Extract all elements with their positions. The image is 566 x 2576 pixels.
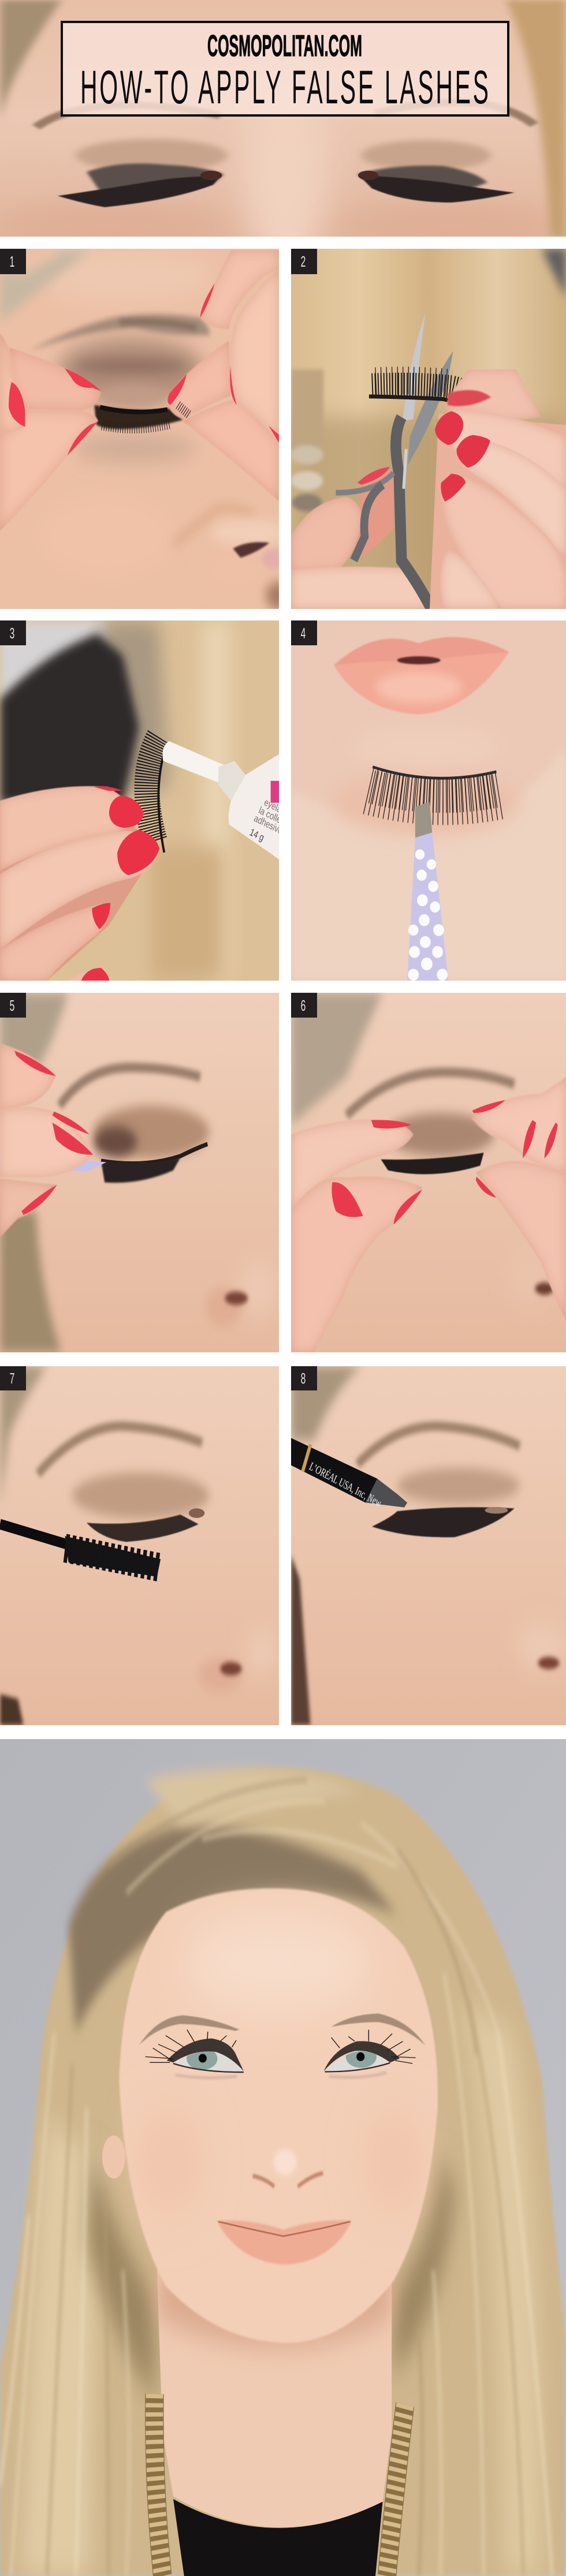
eye: right closed lid xyxy=(358,140,515,203)
step badge 2 xyxy=(291,249,317,274)
glue tube: la colle xyxy=(257,805,282,825)
black top xyxy=(173,2499,382,2576)
left hand under scissors xyxy=(291,467,426,609)
eyebrow xyxy=(358,1426,520,1464)
step badge 3 xyxy=(0,620,26,645)
final portrait eyes and brows xyxy=(139,2013,425,2080)
left hand fingers with nails xyxy=(291,1119,422,1352)
panel: step 1 pressing lash on xyxy=(0,249,293,610)
glue tube: eyelash xyxy=(262,797,291,819)
right hand fingers xyxy=(430,369,566,609)
eye with liner and lashes xyxy=(372,1468,520,1537)
mascara wand xyxy=(0,1524,161,1577)
step badge 3: 3 xyxy=(10,625,14,642)
step badge 7: 7 xyxy=(10,1370,14,1387)
panel: step 8 eyeliner pencil xyxy=(291,1366,566,1725)
hair strands xyxy=(0,1780,552,2576)
glue tube xyxy=(162,741,291,859)
step badge 1: 1 xyxy=(10,253,14,270)
title box xyxy=(62,22,508,115)
step badge 7 xyxy=(0,1366,26,1390)
tweezer tip xyxy=(0,1151,106,1172)
eyebrows xyxy=(139,2013,425,2045)
ear xyxy=(102,2136,125,2178)
panel: step 7 mascara wand xyxy=(0,1366,279,1725)
hair xyxy=(0,1768,566,2576)
step badge 8: 8 xyxy=(301,1370,306,1387)
hand fingers with nails xyxy=(0,1044,93,1237)
false lash line xyxy=(94,405,183,429)
title box: COSMOPOLITAN.COM xyxy=(207,29,362,63)
face xyxy=(119,1889,438,2343)
nose xyxy=(173,508,293,610)
necklace blur xyxy=(291,369,323,511)
right hand fingers xyxy=(167,250,279,502)
panel: step 3 lash glue xyxy=(0,620,291,981)
panel: step 6 pressing lash with fingers xyxy=(291,993,566,1352)
panel: step 5 placing lash with tweezers xyxy=(0,993,279,1352)
step badge 4: 4 xyxy=(301,625,306,642)
icon: nostril xyxy=(538,1657,560,1669)
eyebrow xyxy=(347,1072,515,1115)
fingers with red nails xyxy=(0,786,159,981)
gold necklace xyxy=(154,2394,405,2576)
panel: final portrait with lashes xyxy=(0,1739,566,2576)
eyeliner pencil xyxy=(291,1438,407,1510)
step badge 5: 5 xyxy=(10,997,14,1014)
right hand fingers with nails xyxy=(471,1077,566,1321)
glue tube: adhesive xyxy=(252,813,284,837)
headline: HOW-TO APPLY FALSE LASHES xyxy=(80,60,489,114)
eye: left closed lid xyxy=(58,139,228,207)
nose and mouth xyxy=(217,2149,352,2265)
step badge 6 xyxy=(291,993,317,1018)
lips xyxy=(334,637,509,715)
step badge 6: 6 xyxy=(301,997,306,1014)
false lash held xyxy=(147,737,167,853)
eye makeup and lashes xyxy=(72,1472,209,1542)
panel: hero closed eyes with title xyxy=(0,0,566,268)
eyebrow xyxy=(59,1067,200,1106)
eye makeup and lashes xyxy=(94,1106,209,1183)
panel: step 4 lash on tweezers in front of lips xyxy=(291,620,566,981)
eyeliner pencil: L’ORÉAL USA, Inc, New xyxy=(308,1459,383,1510)
eyebrow xyxy=(38,1426,202,1474)
false lash xyxy=(368,767,500,801)
icon: nostril xyxy=(225,1292,248,1305)
step badge 5 xyxy=(0,993,26,1018)
false lash strip xyxy=(369,380,494,403)
step badge 2: 2 xyxy=(301,253,306,270)
step badge 1 xyxy=(0,249,26,274)
panel: step 2 trimming lash with scissors xyxy=(291,249,566,609)
icon: nostril xyxy=(535,1283,554,1295)
left hand fingers xyxy=(0,334,101,531)
icon: nostril xyxy=(220,1662,242,1676)
eyeshadow lid xyxy=(58,338,204,407)
step badge 8 xyxy=(291,1366,317,1390)
icon: scissors xyxy=(336,313,453,609)
eyebrow xyxy=(29,314,210,351)
tweezers xyxy=(407,802,448,981)
lash pressed on lid xyxy=(381,1153,484,1174)
glue tube: 14 g xyxy=(248,827,266,844)
step badge 4 xyxy=(291,620,317,645)
right eye xyxy=(324,2030,416,2077)
left eye xyxy=(146,2030,244,2078)
neck xyxy=(157,2270,392,2528)
